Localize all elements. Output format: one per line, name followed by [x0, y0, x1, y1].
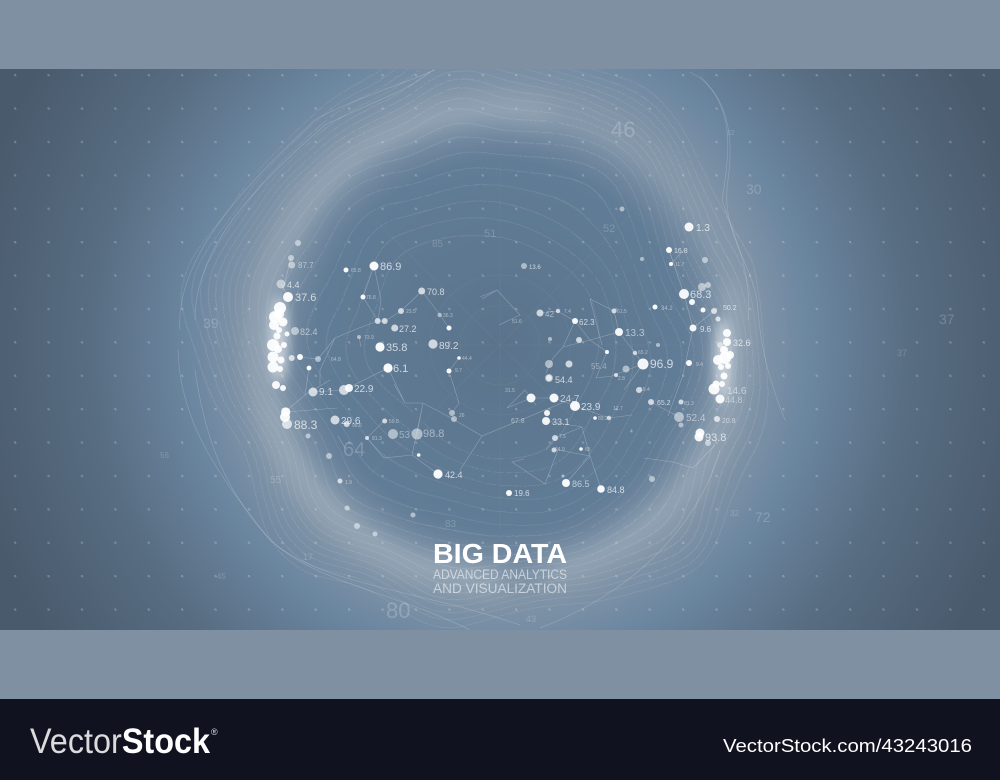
glowing ring — [262, 110, 735, 578]
small node labels: 9.4 — [696, 362, 703, 368]
faint background numbers: 52 — [603, 223, 615, 235]
large node labels: 16.8 — [674, 248, 688, 255]
large node labels: 65.2 — [657, 400, 671, 407]
subtitle — [433, 567, 567, 596]
faint background numbers: 32 — [727, 130, 735, 137]
large node labels: 13.3 — [625, 328, 645, 339]
faint background numbers — [160, 117, 955, 624]
faint background numbers: 17 — [303, 552, 313, 562]
top band — [0, 0, 1000, 69]
small node labels: 7.5 — [559, 434, 566, 440]
small node labels: 11.7 — [675, 262, 685, 268]
faint background numbers: 51 — [484, 228, 496, 240]
small node labels: 81.3 — [684, 401, 694, 407]
small node labels: 31.5 — [505, 388, 515, 394]
large node labels: 13.6 — [529, 265, 541, 271]
large node labels: 27.2 — [399, 324, 417, 334]
large node labels: 96.9 — [650, 357, 674, 371]
large node labels: 34.2 — [661, 306, 673, 312]
small node labels: 59.4 — [640, 387, 650, 393]
main visualization panel — [0, 47, 1000, 630]
large node labels: 68.3 — [690, 289, 711, 301]
small node labels: 73.9 — [364, 335, 374, 341]
large node labels: 86.9 — [380, 261, 401, 273]
small node labels: 59.8 — [389, 419, 399, 425]
faint background numbers: 32 — [730, 509, 739, 518]
small node labels: 12.7 — [613, 406, 623, 412]
small node labels: 67.8 — [511, 418, 525, 425]
faint background numbers: 64 — [343, 439, 365, 461]
small node labels: 24.9 — [555, 447, 565, 453]
large node labels: 9.1 — [319, 387, 333, 398]
large node labels: 22.9 — [354, 384, 374, 395]
small node labels: 51.6 — [512, 319, 522, 325]
small node labels: 89.2 — [598, 416, 608, 422]
small node labels: 81.3 — [372, 436, 382, 442]
large node labels — [287, 223, 751, 498]
large node labels: 19.6 — [514, 489, 530, 498]
small node labels: 61.5 — [617, 309, 627, 315]
faint background numbers: 39 — [203, 315, 219, 331]
large node labels: 98.8 — [423, 428, 444, 440]
small node labels: 26 — [459, 413, 465, 419]
small node labels: 1.9 — [345, 480, 352, 486]
large node labels: 42.4 — [445, 470, 463, 480]
footer url: VectorStock.com/43243016 — [723, 736, 972, 756]
faint background numbers: 85 — [432, 239, 444, 250]
large node labels: 53 — [399, 430, 411, 441]
subtitle line 1: ADVANCED ANALYTICS — [433, 567, 567, 582]
large node labels: 35.8 — [386, 342, 407, 354]
footer logo: ® — [211, 727, 218, 737]
large node labels: 52.4 — [686, 413, 706, 424]
large node labels: 24.7 — [560, 394, 580, 405]
central radial spokes — [370, 215, 630, 475]
title: BIG DATA: BIG DATA — [433, 538, 567, 569]
large node labels: 84.8 — [607, 485, 625, 495]
large node labels: 86.5 — [572, 479, 590, 489]
small node labels: 4 — [630, 429, 633, 435]
large node labels: 55.4 — [591, 362, 607, 371]
outer wavy contours — [178, 70, 785, 630]
large node labels: 44.8 — [725, 395, 743, 405]
large node labels: 9.6 — [700, 325, 712, 334]
large node labels: 88.3 — [294, 418, 318, 432]
small node labels: 65.2 — [638, 350, 648, 356]
large node labels: 23.9 — [581, 402, 601, 413]
large node labels: 62.3 — [579, 318, 595, 327]
faint background numbers: 72 — [755, 509, 771, 525]
subtitle line 2: AND VISUALIZATION — [433, 581, 567, 596]
network links — [281, 250, 715, 489]
large node labels: 6.1 — [393, 363, 408, 375]
bottom band — [0, 630, 1000, 699]
large node labels: 93.8 — [705, 432, 726, 444]
large node labels: 37.6 — [295, 292, 316, 304]
large node labels: 50.2 — [723, 305, 737, 312]
large node labels: 29.6 — [341, 416, 361, 427]
right data nodes — [506, 206, 734, 496]
large node labels: 89.2 — [439, 341, 459, 352]
small node labels: 36.3 — [443, 313, 453, 319]
small node labels: 96.6 — [352, 423, 362, 429]
small node labels: 44.4 — [462, 356, 472, 362]
large node labels: 32.6 — [733, 338, 751, 348]
footer bar — [0, 699, 1000, 780]
faint background numbers: 46 — [611, 117, 635, 142]
large node labels: 87.7 — [298, 261, 314, 270]
large node labels: 20.8 — [722, 418, 736, 425]
small node labels: 65.8 — [351, 268, 361, 274]
small node labels — [331, 262, 703, 486]
faint background numbers: 43 — [526, 614, 536, 624]
large node labels: 14.6 — [727, 386, 747, 397]
faint background numbers: 30 — [746, 181, 762, 197]
faint background numbers: 45 — [217, 572, 226, 581]
dot grid — [0, 69, 1000, 630]
large node labels: 82.4 — [300, 327, 318, 337]
faint background numbers: 55 — [270, 475, 282, 486]
faint background numbers: 80 — [386, 598, 410, 623]
large node labels: 54.4 — [555, 375, 573, 385]
small node labels: 65 — [585, 447, 591, 453]
faint background numbers: 56 — [160, 451, 169, 460]
faint background numbers: 37 — [897, 348, 907, 358]
large node labels: 1.3 — [696, 223, 710, 234]
small node labels: 7.4 — [564, 309, 571, 315]
glowing cluster halos — [270, 296, 731, 402]
left data nodes — [267, 240, 564, 536]
small node labels: 2.8 — [618, 376, 625, 382]
small node labels: 76.8 — [366, 295, 376, 301]
large node labels: 4.4 — [287, 280, 300, 290]
faint background numbers: 37 — [939, 311, 955, 327]
large node labels: 42 — [545, 310, 554, 319]
footer logo: VectorStock — [30, 722, 210, 761]
small node labels: 9.7 — [455, 368, 462, 374]
faint background numbers: 83 — [445, 519, 457, 530]
large node labels: 33.1 — [552, 417, 570, 427]
contour lines — [202, 47, 778, 623]
small node labels: 64.8 — [331, 357, 341, 363]
panel background gradient — [0, 69, 1000, 630]
large node labels: 70.8 — [427, 287, 445, 297]
small node labels: 23.5 — [406, 309, 416, 315]
